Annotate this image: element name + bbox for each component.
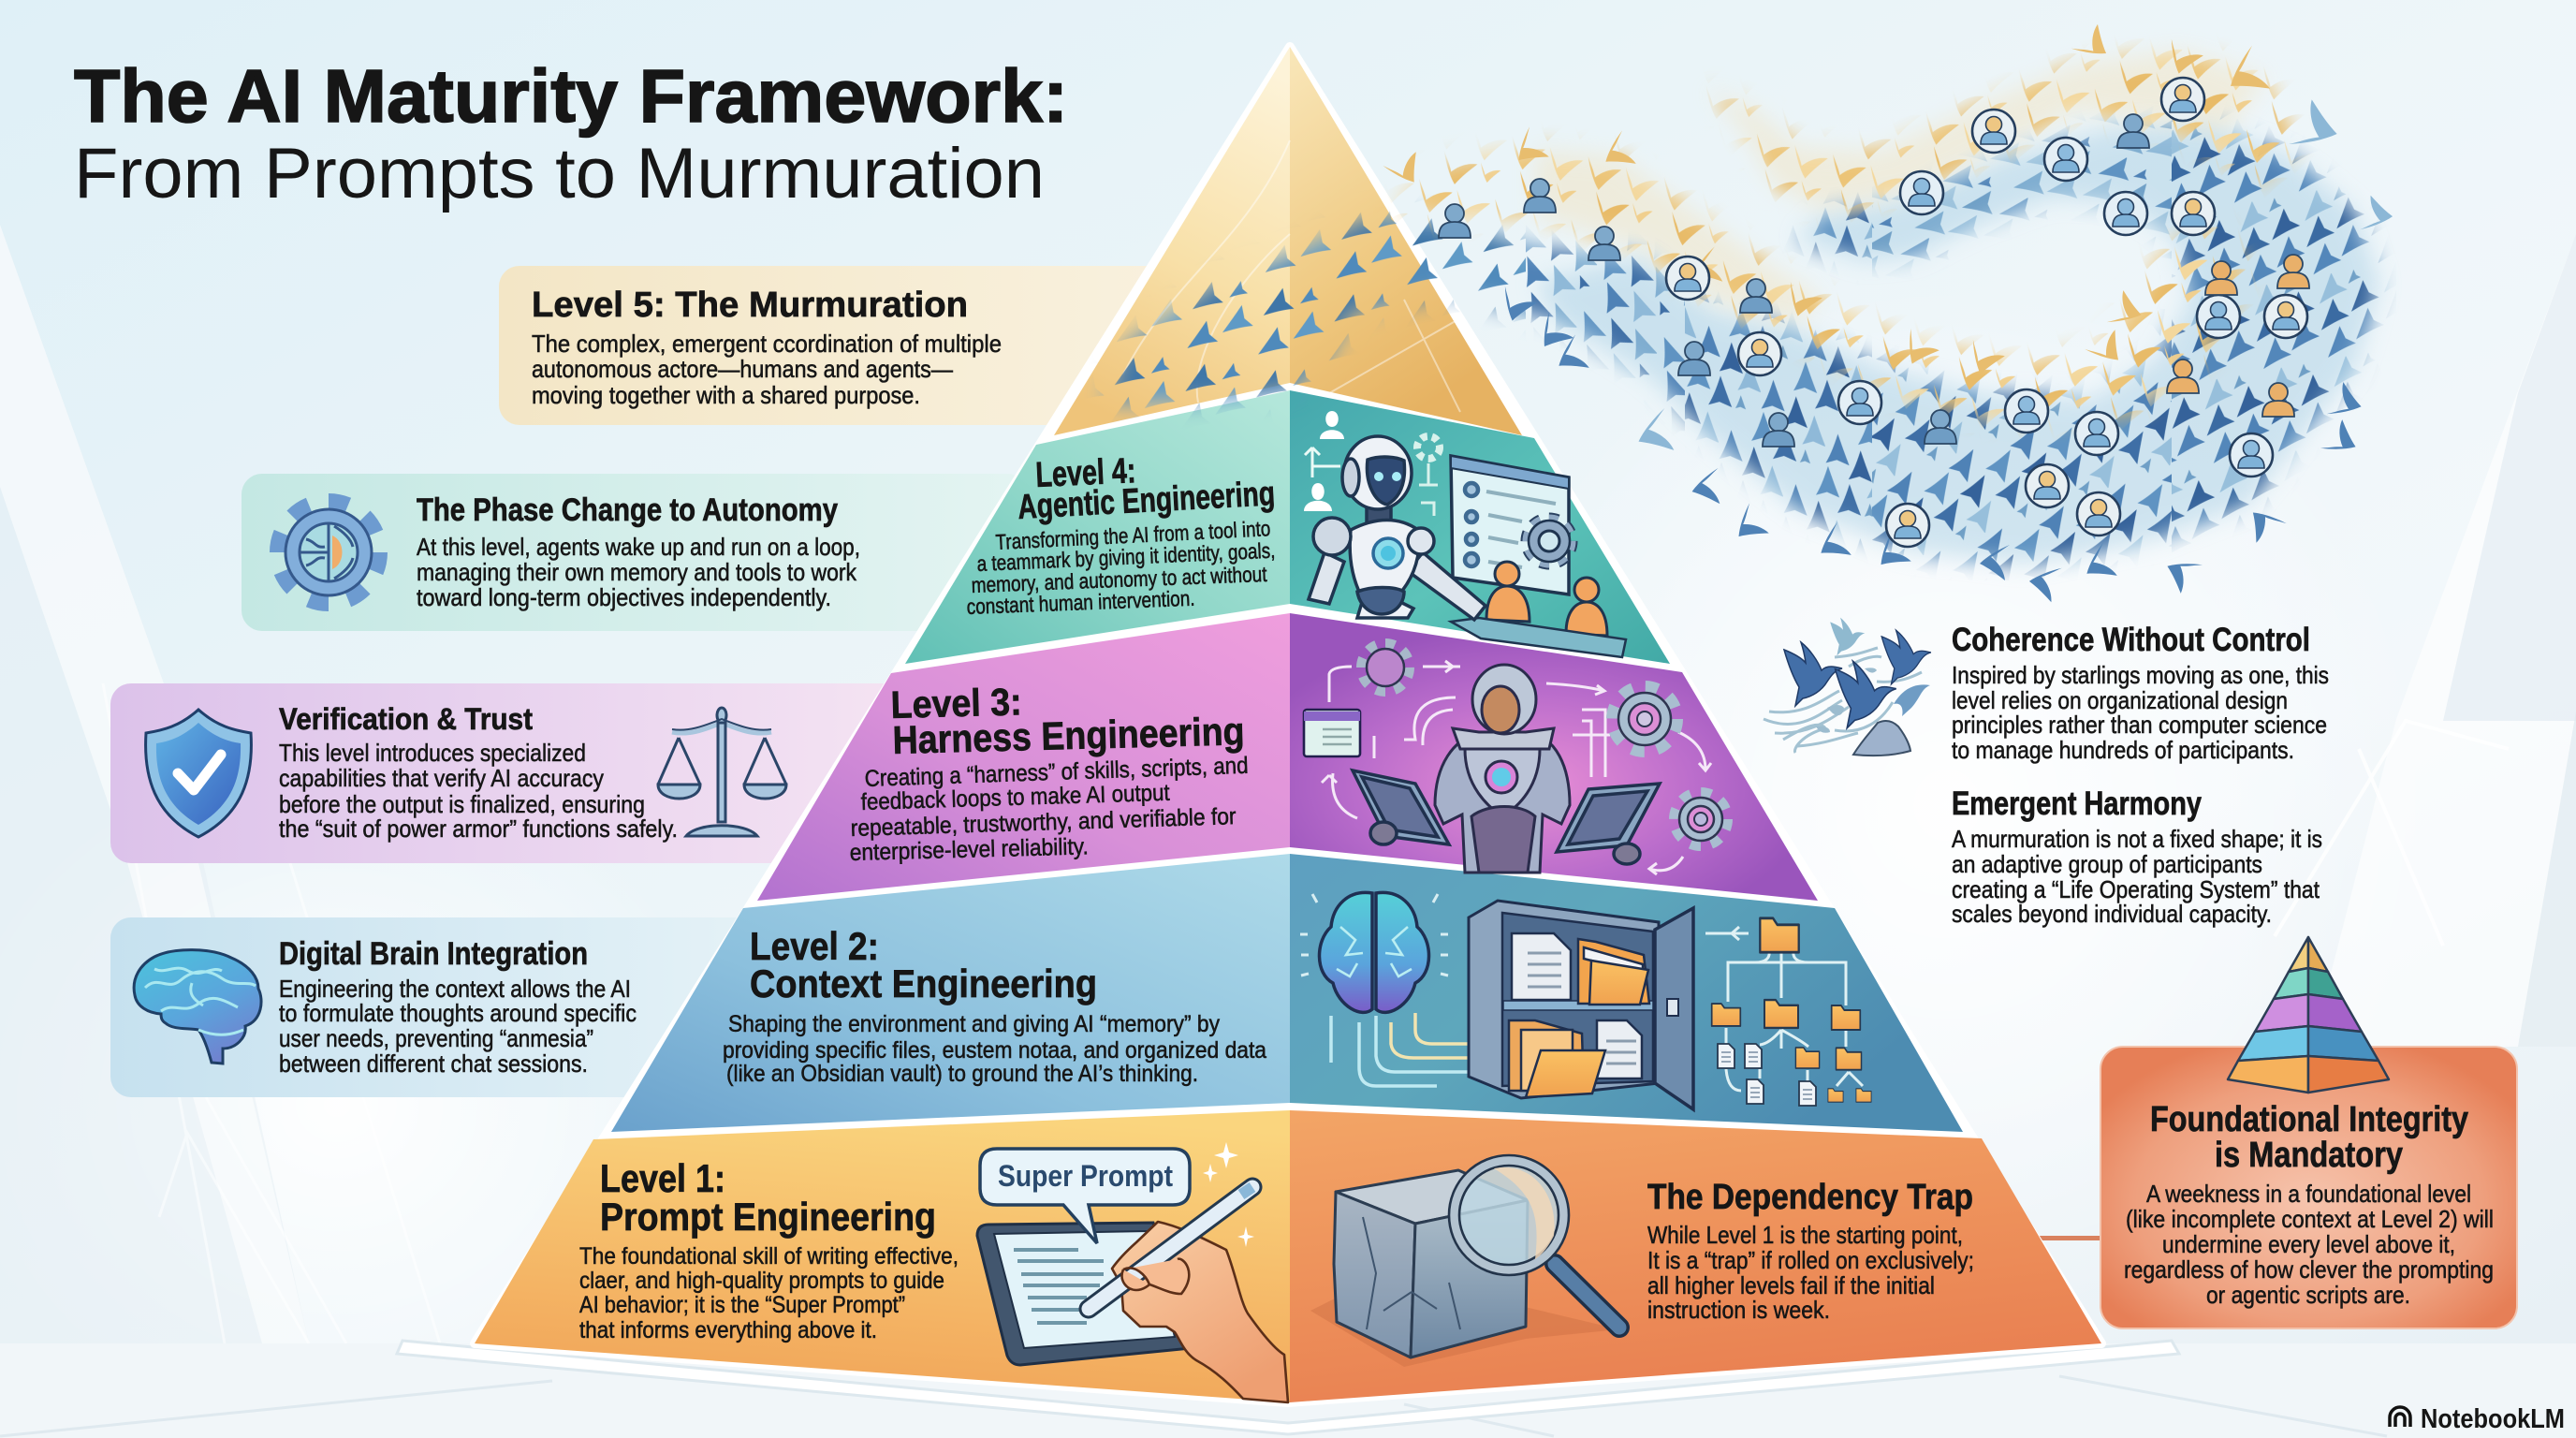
blue birds [1092, 111, 2393, 580]
panel: digital brain integration [110, 917, 766, 1097]
gears [1362, 644, 1726, 844]
text: level 1 label: that informs everything above it. [579, 1317, 877, 1343]
panel: level 5 description: Level 5: The Murmuration [532, 286, 968, 325]
documents and folders [1509, 933, 1649, 1097]
text: level 1 label: Prompt Engineering [600, 1195, 936, 1239]
callout: foundational integrity: is Mandatory [2215, 1136, 2403, 1175]
panel: phase change to autonomy: managing their own memory and tools to work [417, 558, 857, 586]
icon: gear with circuit [280, 504, 377, 601]
text: level 1 label: AI behavior; it is the “Super Prompt” [579, 1292, 905, 1318]
file tree [1705, 927, 1863, 1091]
text block: emergent harmony: scales beyond individual capacity. [1952, 900, 2272, 928]
title: From Prompts to Murmuration [74, 134, 1045, 213]
scattered birds [1495, 97, 2395, 603]
text block: coherence without control: to manage hundreds of participants. [1952, 736, 2294, 764]
murmuration flock [1030, 22, 2434, 603]
text: level 3 label: repeatable, trustworthy, and verifiable for [850, 803, 1237, 842]
panel: verification and trust: This level introduces specialized [279, 739, 586, 767]
text: level 1 label [579, 1156, 959, 1343]
text block: emergent harmony: creating a “Life Operating System” that [1952, 875, 2320, 903]
text block: coherence without control: principles rather than computer science [1952, 711, 2327, 739]
platform [397, 1341, 2179, 1434]
panel: verification and trust: capabilities that verify AI accuracy [279, 764, 604, 792]
text: level 2 label: (like an Obsidian vault) to ground the AI’s thinking. [726, 1061, 1198, 1087]
text: level 4 label: Transforming the AI from a tool into [995, 516, 1271, 554]
panel: verification and trust: Verification & Trust [279, 702, 533, 736]
panel: level 5 description: moving together with a shared purpose. [532, 381, 920, 409]
desk [1451, 618, 1626, 657]
gold birds [1389, 39, 2305, 437]
panel: digital brain integration: Engineering the context allows the AI [279, 975, 631, 1003]
text: level 4 label: a teammark by giving it identity, goals, [976, 538, 1276, 576]
text block: emergent harmony: Emergent Harmony [1952, 785, 2202, 822]
panel: verification and trust: before the output is finalized, ensuring [279, 790, 645, 818]
icon: brain [134, 950, 261, 1064]
panel: digital brain integration: user needs, preventing “anmesia” [279, 1024, 593, 1052]
magnifier [1555, 1264, 1619, 1328]
text block: coherence without control: Coherence Without Control [1952, 622, 2310, 658]
robot body [1309, 436, 1486, 620]
tablet [977, 1223, 1191, 1365]
text: level 4 label: Level 4: [1035, 451, 1136, 495]
illustration: super prompt on tablet: Super Prompt [998, 1159, 1173, 1193]
illustration: robot presenting to people [1304, 411, 1626, 657]
gear on screen [1527, 519, 1572, 564]
text: dependency trap: instruction is week. [1647, 1296, 1830, 1324]
panel: level 5 description: autonomous actore—humans and agents— [532, 355, 953, 383]
participant icons [1439, 78, 2309, 547]
text: dependency trap: all higher levels fail if the initial [1647, 1271, 1935, 1299]
panel: phase change to autonomy: The Phase Change to Autonomy [417, 492, 838, 528]
icon: mini pyramid [2228, 937, 2389, 1093]
text block: coherence without control [1952, 622, 2329, 764]
persons [1486, 562, 1607, 636]
callout: foundational integrity: undermine every level above it, [2162, 1230, 2455, 1258]
level 5 tier [1054, 47, 1522, 435]
door [1655, 908, 1693, 1109]
text: level 2 label: Level 2: [750, 924, 879, 968]
arrows to vault [1331, 1013, 1493, 1086]
text block: emergent harmony [1952, 785, 2322, 928]
level 1 tier [475, 1110, 2101, 1402]
text: level 4 label: memory, and autonomy to act without [971, 562, 1267, 597]
pyramid [475, 47, 2101, 1402]
level 2 tier [611, 854, 1963, 1132]
panel: phase change to autonomy: toward long-term objectives independently. [417, 583, 831, 611]
text: level 3 label: Harness Engineering [892, 709, 1245, 762]
text: dependency trap: The Dependency Trap [1647, 1178, 1973, 1217]
text block: coherence without control: Inspired by starlings moving as one, this [1952, 661, 2329, 689]
panel: verification and trust: the “suit of power armor” functions safely. [279, 814, 678, 843]
text: level 3 label: Level 3: [890, 680, 1022, 726]
text: dependency trap [1647, 1178, 1974, 1324]
callout: foundational integrity: or agentic scripts are. [2206, 1281, 2410, 1309]
callout: foundational integrity [2100, 1047, 2517, 1328]
level 4 tier [905, 390, 1670, 664]
panel: phase change to autonomy [242, 474, 1028, 631]
panel: verification and trust [110, 683, 915, 863]
window card [1304, 710, 1360, 756]
text: level 2 label: providing specific files, eustem notaa, and organized data [723, 1037, 1266, 1064]
panel: level 5 description [499, 266, 1173, 425]
tablets [1353, 770, 1660, 864]
illustration: super prompt on tablet [977, 1142, 1288, 1402]
title: The AI Maturity Framework: [74, 54, 1068, 138]
text: level 3 label [849, 680, 1249, 866]
callout: foundational integrity: (like incomplete context at Level 2) will [2126, 1205, 2494, 1233]
text block: emergent harmony: an adaptive group of participants [1952, 850, 2262, 878]
armor body [1435, 665, 1570, 873]
panel: phase change to autonomy: At this level, agents wake up and run on a loop, [417, 533, 860, 561]
cabinet [1469, 901, 1659, 1098]
text: level 2 label: Context Engineering [750, 961, 1097, 1005]
panel: level 5 description: The complex, emergent ccordination of multiple [532, 330, 1002, 358]
text: level 2 label: Shaping the environment and giving AI “memory” by [728, 1011, 1220, 1037]
title [74, 54, 1068, 213]
text block: coherence without control: level relies on organizational design [1952, 686, 2288, 714]
text: dependency trap: While Level 1 is the starting point, [1647, 1221, 1963, 1249]
brain [1319, 892, 1429, 1012]
level 3 tier [757, 613, 1818, 901]
hand and pen [1112, 1222, 1288, 1402]
text: level 1 label: claer, and high-quality prompts to guide [579, 1268, 944, 1294]
callout: foundational integrity: regardless of how clever the prompting [2124, 1255, 2494, 1284]
connector line [2031, 1236, 2106, 1240]
callout: foundational integrity: Foundational Integrity [2150, 1100, 2468, 1139]
text: level 2 label [723, 924, 1266, 1087]
text: dependency trap: It is a “trap” if rolled on exclusively; [1647, 1246, 1974, 1274]
panel: digital brain integration: between different chat sessions. [279, 1049, 588, 1078]
text: level 1 label: Level 1: [600, 1156, 725, 1200]
icon: shield with check [146, 710, 251, 837]
text: level 4 label: Agentic Engineering [1017, 474, 1276, 526]
text: level 3 label: enterprise-level reliability. [849, 833, 1089, 866]
illustration: context brain, vault and file tree [1300, 892, 1871, 1109]
text: level 1 label: The foundational skill of writing effective, [579, 1243, 959, 1269]
panel: digital brain integration: Digital Brain Integration [279, 936, 588, 972]
text: level 3 label: feedback loops to make AI output [860, 780, 1170, 815]
text: level 4 label: constant human intervention. [966, 586, 1195, 619]
screen [1451, 456, 1569, 594]
panel: digital brain integration: to formulate thoughts around specific [279, 999, 637, 1027]
text block: emergent harmony: A murmuration is not a fixed shape; it is [1952, 825, 2322, 853]
illustration: armored figure with harness [1304, 644, 1726, 874]
icon: balance scales [658, 708, 786, 836]
callout: foundational integrity: A weekness in a foundational level [2146, 1180, 2471, 1208]
text: level 4 label [966, 451, 1276, 619]
text: level 3 label: Creating a “harness” of skills, scripts, and [864, 753, 1249, 792]
illustration: cracked rock under magnifier [1310, 1155, 1619, 1367]
icon: starlings [1764, 618, 1931, 756]
speech bubble [980, 1149, 1190, 1243]
